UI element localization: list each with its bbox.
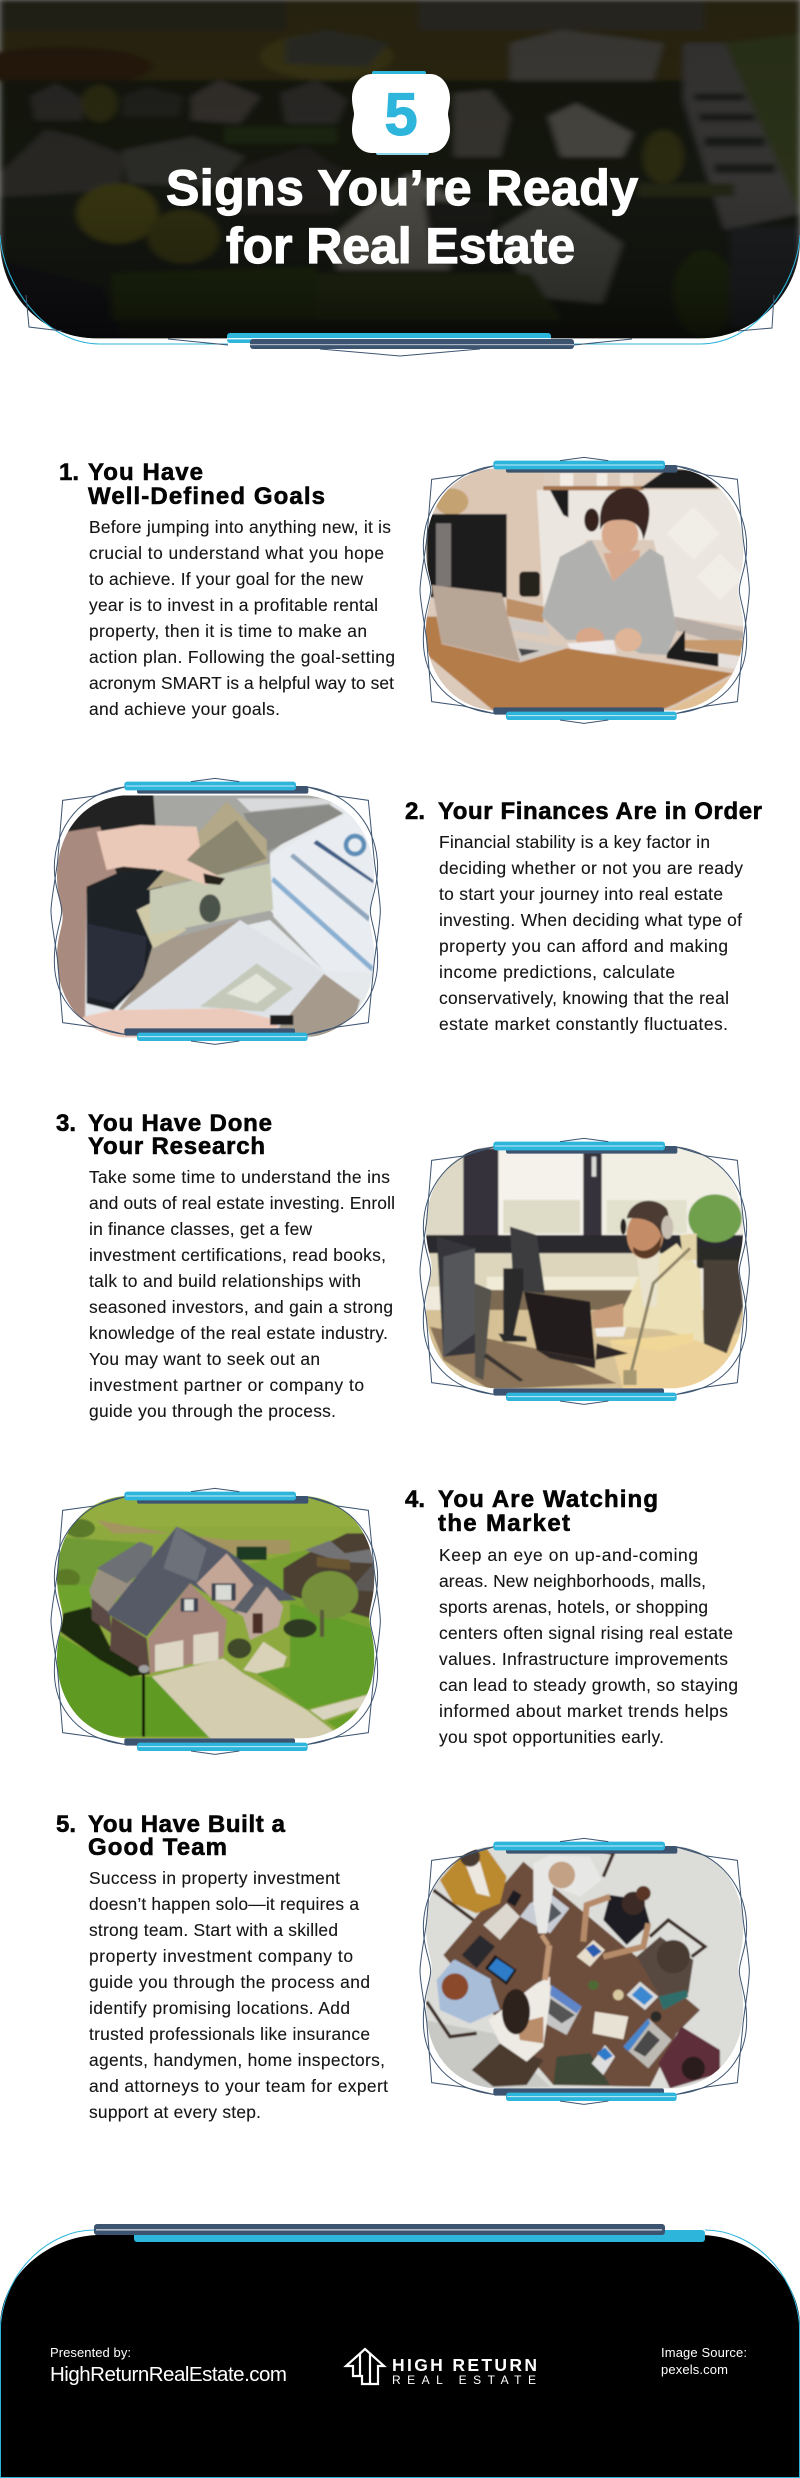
body text 4: areas. New neighborhoods, malls, <box>439 1571 706 1591</box>
heading 1: Well-Defined Goals <box>88 483 325 510</box>
body text 5: trusted professionals like insurance <box>89 2024 370 2044</box>
body text 5: support at every step. <box>89 2102 261 2122</box>
header outline strokes <box>0 235 800 356</box>
heading 5: 5. <box>56 1811 76 1838</box>
body text 3: investment partner or company to <box>89 1375 364 1395</box>
section 3: done your research <box>56 1110 777 1421</box>
logo: HIGH RETURN <box>392 2355 537 2375</box>
heading 4 <box>405 1486 658 1537</box>
body text 1: property, then it is time to make an <box>89 621 367 641</box>
body text 3: guide you through the process. <box>89 1401 336 1421</box>
heading 1 <box>59 459 325 510</box>
body text 4: values. Infrastructure improvements <box>439 1649 728 1669</box>
logo <box>346 2349 537 2387</box>
heading 5: You Have Built a <box>88 1811 286 1838</box>
heading 4: the Market <box>438 1510 570 1537</box>
photo: woman writing at kitchen table <box>426 468 744 710</box>
body text 4: can lead to steady growth, so staying <box>439 1675 738 1695</box>
badge with number 5 <box>352 71 450 155</box>
body text 3: investment certifications, read books, <box>89 1245 386 1265</box>
body text 1: crucial to understand what you hope <box>89 543 384 563</box>
body text 2: income predictions, calculate <box>439 962 675 982</box>
body text 4 <box>439 1545 738 1747</box>
section 1: well-defined goals <box>60 456 750 724</box>
photo: team meeting from above <box>426 1846 744 2088</box>
body text 1: year is to invest in a profitable rental <box>89 595 378 615</box>
heading 5: Good Team <box>88 1834 227 1861</box>
header accent bars <box>227 333 574 349</box>
title <box>166 160 638 274</box>
body text 2: Financial stability is a key factor in <box>439 832 710 852</box>
badge with number 5: 5 <box>384 81 418 148</box>
body text 5 <box>89 1868 388 2122</box>
header photo: aerial neighbourhood <box>0 0 800 338</box>
heading 1: 1. <box>59 459 79 486</box>
section 4: watching the market <box>50 1488 737 1755</box>
heading 3: 3. <box>56 1110 76 1137</box>
title: for Real Estate <box>226 218 575 274</box>
image frame 2 <box>51 778 380 1044</box>
body text 3: knowledge of the real estate industry. <box>89 1323 388 1343</box>
body text 2: to start your journey into real estate <box>439 884 723 904</box>
presented by: Presented by: <box>50 2345 131 2360</box>
body text 5: doesn’t happen solo—it requires a <box>89 1894 359 1914</box>
footer outline strokes <box>0 2230 800 2478</box>
body text 3: Take some time to understand the ins <box>89 1167 390 1187</box>
heading 5 <box>56 1811 286 1861</box>
body text 3: and outs of real estate investing. Enroll <box>89 1193 395 1213</box>
body text 5: guide you through the process and <box>89 1972 370 1992</box>
body text 2: investing. When deciding what type of <box>439 910 742 930</box>
heading 4: You Are Watching <box>438 1486 658 1513</box>
body text 1: action plan. Following the goal-setting <box>89 647 395 667</box>
heading 2: Your Finances Are in Order <box>438 798 762 825</box>
footer <box>0 2224 800 2478</box>
presented by <box>50 2345 287 2386</box>
image frame 4 <box>51 1488 380 1754</box>
body text 3: talk to and build relationships with <box>89 1271 361 1291</box>
body text 4: Keep an eye on up-and-coming <box>439 1545 698 1565</box>
heading 4: 4. <box>405 1486 425 1513</box>
body text 4: informed about market trends helps <box>439 1701 728 1721</box>
image source: pexels.com <box>661 2362 728 2377</box>
photo: suburban house from above <box>57 1496 374 1738</box>
body text 5: property investment company to <box>89 1946 353 1966</box>
body text 1: and achieve your goals. <box>89 699 280 719</box>
presented by: HighReturnRealEstate.com <box>50 2363 287 2386</box>
body text 1 <box>89 517 395 719</box>
body text 2: property you can afford and making <box>439 936 728 956</box>
body text 4: sports arenas, hotels, or shopping <box>439 1597 708 1617</box>
body text 2: conservatively, knowing that the real <box>439 988 729 1008</box>
footer background <box>0 2235 800 2478</box>
body text 1: to achieve. If your goal for the new <box>89 569 363 589</box>
body text 2: deciding whether or not you are ready <box>439 858 743 878</box>
body text 5: strong team. Start with a skilled <box>89 1920 338 1940</box>
body text 4: centers often signal rising real estate <box>439 1623 733 1643</box>
body text 4: you spot opportunities early. <box>439 1727 664 1747</box>
body text 2 <box>439 832 743 1034</box>
image frame 3 <box>420 1138 749 1404</box>
logo icon: house arrow <box>346 2349 384 2384</box>
logo: REAL ESTATE <box>392 2373 536 2387</box>
heading 1: You Have <box>88 459 203 486</box>
body text 1: acronym SMART is a helpful way to set <box>89 673 394 693</box>
heading 3: Your Research <box>88 1133 265 1160</box>
section 2: finances in order <box>50 778 762 1045</box>
body text 3: in finance classes, get a few <box>89 1219 312 1239</box>
body text 3 <box>89 1167 395 1421</box>
title: Signs You’re Ready <box>166 160 638 216</box>
header banner <box>0 0 800 380</box>
photo: hands holding dollar bills <box>57 795 374 1038</box>
body text 5: agents, handymen, home inspectors, <box>89 2050 385 2070</box>
image source <box>661 2345 747 2377</box>
section 5: good team <box>56 1811 777 2122</box>
photo: man with headphones at desk <box>426 1146 744 1388</box>
body text 2: estate market constantly fluctuates. <box>439 1014 728 1034</box>
image frame 1 <box>420 457 749 723</box>
image source: Image Source: <box>661 2345 747 2360</box>
body text 3: You may want to seek out an <box>89 1349 320 1369</box>
heading 2: 2. <box>405 798 425 825</box>
footer accent bars <box>94 2224 705 2242</box>
body text 5: identify promising locations. Add <box>89 1998 350 2018</box>
body text 1: Before jumping into anything new, it is <box>89 517 391 537</box>
body text 5: and attorneys to your team for expert <box>89 2076 388 2096</box>
image frame 5 <box>420 1838 749 2104</box>
body text 5: Success in property investment <box>89 1868 340 1888</box>
body text 3: seasoned investors, and gain a strong <box>89 1297 393 1317</box>
heading 3 <box>56 1110 272 1160</box>
heading 3: You Have Done <box>88 1110 272 1137</box>
